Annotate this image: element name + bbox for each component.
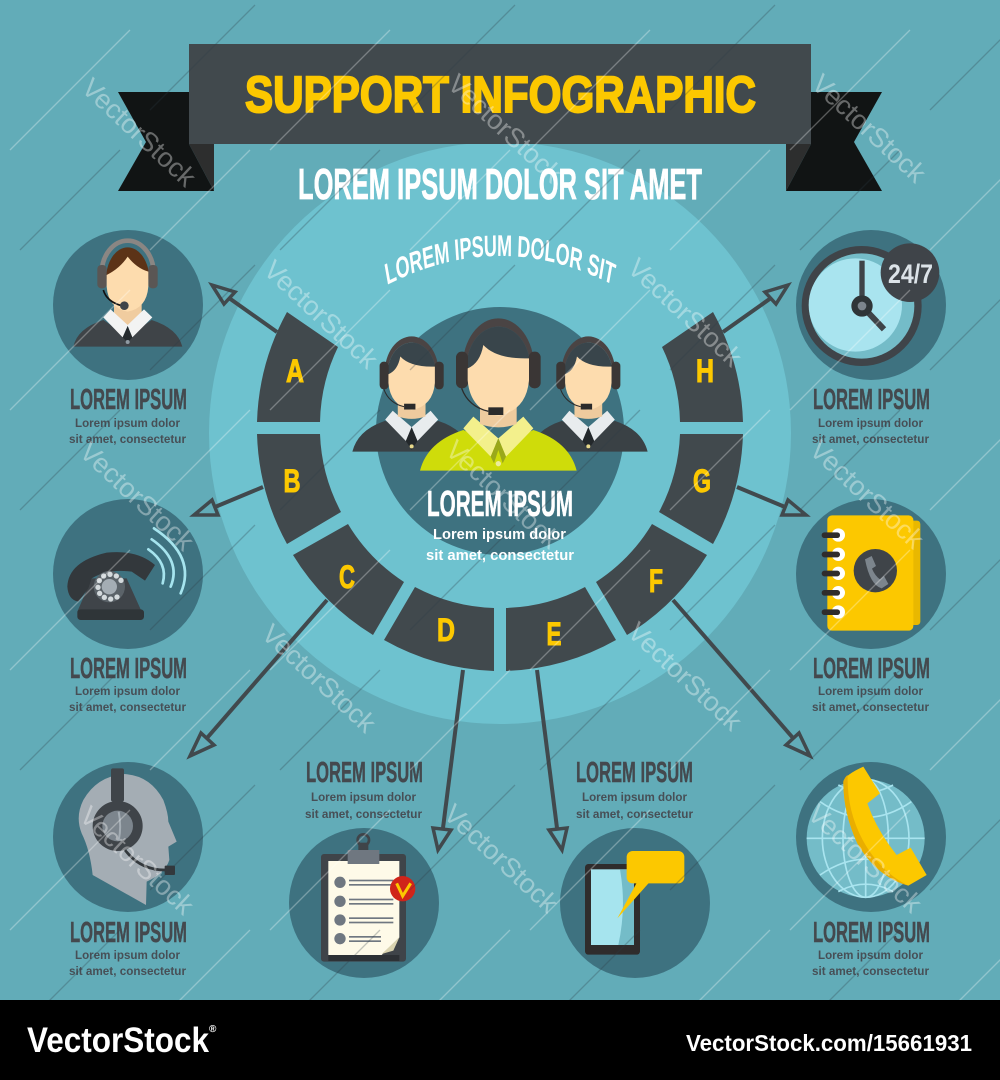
segment A: A [286,353,304,389]
label: Lorem ipsum dolor [75,948,180,962]
footer url: VectorStock.com/15661931 [686,1030,972,1056]
label [812,653,930,714]
footer brand: VectorStock [27,1021,209,1060]
watermark text: VectorStock [622,252,748,373]
watermark text: VectorStock [258,254,384,375]
label: LOREM IPSUM [70,384,187,416]
arrows [190,285,810,850]
footer registered mark: ® [209,1024,217,1035]
icon: clipboard [289,828,439,978]
central text: sit amet, consectetur [426,548,574,564]
watermark text: VectorStock [74,436,200,557]
label: sit amet, consectetur [812,700,929,714]
curved heading: LOREM IPSUM DOLOR SIT [384,235,616,284]
title: SUPPORT INFOGRAPHIC [245,66,756,123]
watermark text: VectorStock [438,798,564,919]
watermark text: VectorStock [802,798,928,919]
watermark text: VectorStock [442,68,568,189]
icon: agent [53,230,203,380]
segment B: B [284,463,300,499]
label: sit amet, consectetur [812,964,929,978]
segment H: H [696,353,714,389]
arrow H [723,285,788,332]
segment B [257,434,341,544]
icon: rotary telephone [53,499,203,649]
panel: clock 24/7 [796,230,946,446]
label: Lorem ipsum dolor [311,790,416,804]
central text [426,483,574,564]
label: Lorem ipsum dolor [582,790,687,804]
label [812,384,930,446]
centre agent [420,318,577,471]
arrow G [737,487,806,515]
central text: Lorem ipsum dolor [433,527,566,543]
label: LOREM IPSUM [70,917,187,949]
label: Lorem ipsum dolor [818,948,923,962]
left agent [352,336,471,452]
watermark text: VectorStock [74,800,200,921]
central text: LOREM IPSUM [427,483,573,524]
panel: telephone [53,499,203,714]
label: Lorem ipsum dolor [818,684,923,698]
watermark text: VectorStock [256,618,382,739]
subtitle: LOREM IPSUM DOLOR SIT AMET [298,160,702,209]
icon: clock [796,230,946,380]
large light circle [209,142,791,724]
central dark circle [376,307,624,555]
label [69,384,187,446]
watermark text: VectorStock [76,72,202,193]
segment E: E [546,616,562,652]
label: sit amet, consectetur [576,807,693,821]
segment E [506,587,616,671]
label: sit amet, consectetur [69,432,186,446]
arrow D [433,670,463,850]
segment D [384,587,494,671]
segment C: C [339,559,355,595]
label [812,917,930,978]
segmented ring [257,312,743,671]
segment H [662,312,743,422]
label [69,653,187,714]
label [69,917,187,978]
watermark text: VectorStock [440,434,566,555]
arrow A [212,285,277,332]
label: LOREM IPSUM [576,757,693,789]
footer bar [0,1000,1000,1080]
arrow B [194,487,263,515]
segment D: D [437,612,455,648]
icon: head with headset [53,762,203,912]
segment G [659,434,743,544]
support team figures [352,318,648,471]
panel: phone book [796,499,946,714]
arrow E [537,670,567,850]
segment G: G [693,463,711,499]
icon: globe with handset [796,762,946,912]
24/7 badge text: 24/7 [888,259,933,289]
label: Lorem ipsum dolor [75,684,180,698]
panel: global call [796,762,946,978]
label: Lorem ipsum dolor [75,416,180,430]
arrow C [190,600,327,756]
arrow F [673,600,810,756]
icon: phone book [796,499,946,649]
title banner [118,44,882,191]
label: sit amet, consectetur [69,964,186,978]
label: LOREM IPSUM [306,757,423,789]
panel: clipboard [289,757,439,978]
segment A [257,312,338,422]
segment F [596,524,707,635]
label [576,757,693,821]
label: sit amet, consectetur [305,807,422,821]
panel: tablet [560,757,710,978]
label: sit amet, consectetur [69,700,186,714]
watermark text: VectorStock [804,434,930,555]
icon: tablet with speech bubble [560,828,710,978]
right agent [529,336,648,452]
label: sit amet, consectetur [812,432,929,446]
segment C [293,524,404,635]
watermark text: VectorStock [806,68,932,189]
label: Lorem ipsum dolor [818,416,923,430]
watermark text: VectorStock [622,616,748,737]
segment F: F [649,563,663,599]
label [305,757,423,821]
panel: headset [53,762,203,978]
panel: agent [53,230,203,446]
watermark text [74,68,932,921]
label: LOREM IPSUM [70,653,187,685]
